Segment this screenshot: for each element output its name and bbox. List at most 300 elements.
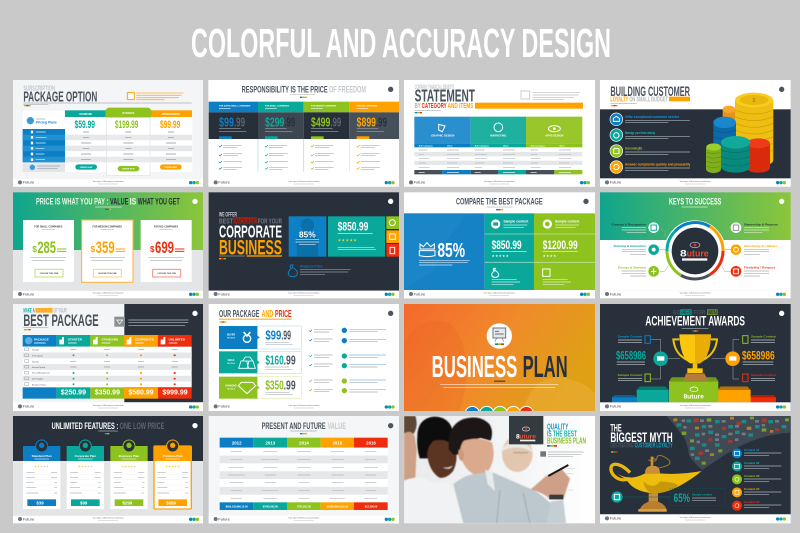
colour bar xyxy=(24,329,31,330)
intro note xyxy=(521,91,580,100)
heading: package option xyxy=(23,83,97,105)
podium xyxy=(612,377,776,402)
coin stacks xyxy=(706,93,773,173)
plan: business: $299 xyxy=(123,500,133,505)
heading: statement: STATEMENT xyxy=(415,86,475,106)
tip 3 xyxy=(610,145,690,157)
heading: compare: COMPARE THE BEST PACKAGE xyxy=(456,197,543,207)
offer panel: teal xyxy=(485,213,534,290)
data table: Sub Category xyxy=(419,144,433,147)
pricing table: Pricing Plans xyxy=(36,121,57,125)
table totals: $7563,562.00 xyxy=(263,505,279,508)
callout: right top: Sample Content xyxy=(751,335,776,339)
podium: 8uture xyxy=(683,393,704,400)
footer xyxy=(209,402,399,411)
panel: present and future value slide xyxy=(209,416,399,523)
plan: business xyxy=(105,108,151,175)
footer: Your topic of Business presentation xyxy=(92,404,124,407)
value table xyxy=(220,438,388,510)
package row: gold: .99 xyxy=(284,353,296,367)
panel: unlimited features slide xyxy=(13,416,203,523)
heading: statement: COMPANY FINANCIAL BENEFIT xyxy=(415,85,454,91)
colour bar xyxy=(611,105,618,106)
plan: business: $199.99 xyxy=(115,119,138,131)
package row: silver xyxy=(219,326,301,349)
plan: business: ORDER NOW xyxy=(122,169,135,171)
table prices xyxy=(23,387,192,399)
table rows: Social Management xyxy=(32,372,50,375)
year headers: 2012 xyxy=(232,440,242,445)
heading: price and value: VALUE xyxy=(110,197,128,207)
price card: medium: $ xyxy=(91,245,96,254)
package row: diamond: .99 xyxy=(284,379,296,393)
price panels: $99 xyxy=(219,116,234,130)
footer xyxy=(13,402,203,411)
panel: quality photo slide xyxy=(404,416,595,523)
analysis price xyxy=(288,265,351,277)
plan: standard: ORDER NOW xyxy=(80,167,92,169)
plan: professional: $99.99 xyxy=(160,119,180,131)
green coin stack xyxy=(706,143,721,173)
footer: Your topic of Business presentation xyxy=(288,517,319,520)
table prices: $250.99 xyxy=(61,390,86,397)
content 02 xyxy=(732,461,781,471)
table header: STANDARD xyxy=(102,338,119,342)
price card: big xyxy=(141,220,192,282)
plan: standard xyxy=(23,440,60,509)
stat: 65 percent: 65% xyxy=(674,491,690,505)
colour bar xyxy=(496,209,503,210)
table totals: $3256,8564,255.00 xyxy=(327,505,349,508)
heading: unlimited features: ONE LOW PRICE xyxy=(120,421,164,431)
table totals: $741,652.00 xyxy=(297,505,312,508)
heading: best package: OF YOUR xyxy=(53,308,67,314)
package row: silver: .99 xyxy=(281,329,291,343)
callout: left top: Sample Content xyxy=(618,335,642,339)
price card: small: $ xyxy=(32,245,37,254)
footer xyxy=(600,402,791,411)
footer: Your topic of Business presentation xyxy=(483,292,515,295)
plan: standard: ★★★★★ xyxy=(34,464,49,468)
feature circles xyxy=(342,328,386,393)
photo: team at whiteboard xyxy=(404,416,575,523)
callout: right top xyxy=(743,335,776,343)
footer: Future xyxy=(610,291,622,296)
key: energy xyxy=(618,266,659,277)
colour bar xyxy=(219,258,226,259)
content 01: Content 01 xyxy=(744,448,760,452)
content 02: Content 02 xyxy=(744,461,760,465)
callout: left value: $658986 xyxy=(616,350,646,363)
table header: STARTER xyxy=(68,338,83,342)
heading: achievement awards: FOR xyxy=(693,310,705,317)
icon: menu xyxy=(583,199,589,204)
heading: responsibility: OF FREEDOM xyxy=(329,84,366,94)
panel: responsibility pricing slide xyxy=(208,80,399,187)
stat: 85 percent xyxy=(289,216,326,257)
content 03 xyxy=(732,474,781,484)
plan: premium: Premium Plan xyxy=(163,454,183,458)
heading: biggest myth: THE xyxy=(610,423,622,435)
footer: Future xyxy=(218,516,231,521)
heading: corporate business: WE OFFER xyxy=(219,213,237,219)
stat panel: 85 percent: 85% xyxy=(437,240,465,262)
price panels: .99 xyxy=(376,116,387,130)
table rows xyxy=(23,347,192,387)
icon: menu xyxy=(388,87,393,92)
package row: silver: $99 xyxy=(265,329,281,343)
offer panel: green: $1200.99 xyxy=(543,238,578,252)
package row: diamond: $350 xyxy=(265,379,284,393)
column headers xyxy=(209,102,399,112)
heading: building customer: LOYALTY xyxy=(610,97,629,104)
watch xyxy=(549,495,563,499)
table rows xyxy=(220,448,388,502)
logo box xyxy=(509,416,543,444)
colour bar xyxy=(105,433,109,434)
colour bar xyxy=(300,433,307,434)
key: sensitivity: Sensitivity To Others xyxy=(744,244,778,248)
price panels: $899 xyxy=(357,116,376,130)
plan: premium: $699 xyxy=(166,500,176,505)
orange coin stack xyxy=(723,106,735,129)
content 03: Content 03 xyxy=(744,474,760,478)
package row: gold xyxy=(219,351,301,373)
plan: standard xyxy=(65,110,107,170)
footer: Your topic of Business presentation xyxy=(679,516,711,519)
pricing table xyxy=(23,108,192,175)
heading: price and value: IS xyxy=(130,197,136,207)
heading: achievement awards: GO xyxy=(673,310,680,317)
heading: package option: SUBSCRIPTION xyxy=(23,83,55,92)
plan: business: BUSINESS xyxy=(122,113,135,115)
colour bar xyxy=(611,451,618,453)
price card: medium: FOR MEDIUM COMPANIES xyxy=(93,225,123,228)
price panels: $499 xyxy=(311,116,330,130)
offer panel: green: Sample content xyxy=(555,220,580,224)
key: ownership xyxy=(731,222,778,233)
heading: business plan: PLAN xyxy=(523,350,568,384)
heading: achievement awards xyxy=(645,309,745,329)
footer: Your topic of Business presentation xyxy=(92,517,124,520)
plan: standard: STANDARD xyxy=(79,113,92,116)
icon: orange money xyxy=(725,351,740,366)
price card: medium: 359 xyxy=(96,238,115,257)
tip 1 xyxy=(610,113,690,126)
grey shirt xyxy=(453,471,555,523)
key: training xyxy=(613,244,659,255)
key: sensitivity xyxy=(731,244,778,255)
package row: gold: GOLD xyxy=(228,360,235,362)
connectors xyxy=(651,339,739,379)
heading: statement: AND ITEMS xyxy=(448,101,473,110)
note on dark panel xyxy=(114,317,188,327)
footer xyxy=(404,179,595,187)
heading: biggest myth: CUSTOMER LOYALTY xyxy=(635,443,673,450)
heading: best package: CHOICE xyxy=(36,308,52,314)
footer xyxy=(209,291,399,298)
colour bar xyxy=(105,209,111,210)
offer panel: green xyxy=(534,213,595,290)
table rows: Internet Speed xyxy=(32,366,45,369)
heading: quality xyxy=(547,422,586,446)
comparison table xyxy=(23,335,192,399)
key: ownership: Ownership & Purpose xyxy=(744,222,778,226)
dark panel xyxy=(600,109,791,178)
footer: Your topic of Business presentation xyxy=(679,180,711,183)
panel: achievement awards slide xyxy=(600,304,791,411)
key: flexibility xyxy=(731,266,775,277)
year headers: 2014 xyxy=(299,440,309,445)
plan: business xyxy=(110,440,148,509)
category bands: MARKETING xyxy=(490,133,506,137)
heading: best package: MAKE A xyxy=(23,308,35,314)
package row: diamond: DIAMOND xyxy=(225,384,237,387)
central ring logo: 8 xyxy=(680,248,687,258)
offer panel: teal: ★★★★★ xyxy=(492,254,509,258)
stat: 65 percent: Sample content xyxy=(692,493,712,497)
icon: pricing plans xyxy=(27,117,34,124)
table prices: $580.99 xyxy=(128,390,154,397)
year headers: 2016 xyxy=(366,440,376,445)
stat: package price: $850.99 xyxy=(338,220,369,234)
table header xyxy=(23,335,192,347)
analysis price: Analysis Price xyxy=(300,265,323,269)
price panels: .99 xyxy=(330,116,341,130)
callout: left bottom xyxy=(618,373,650,382)
plan: premium: ★★★★★ xyxy=(165,464,180,468)
stat: package price: ★★★★★ xyxy=(338,237,357,242)
blue coin stack xyxy=(713,117,736,160)
feature lists xyxy=(219,139,380,172)
callout: right bottom: Sample Content xyxy=(751,373,776,377)
panel: business plan slide xyxy=(404,304,595,420)
heading: our package: AND xyxy=(262,309,274,320)
footer xyxy=(404,291,595,298)
plan: business: Business Plan xyxy=(119,454,139,458)
content 05 xyxy=(732,500,781,511)
footer: Future xyxy=(218,404,231,409)
key: concept: Concept & Recognition xyxy=(611,222,646,226)
table totals: $659,120,866.12.00 xyxy=(226,505,248,508)
colour bar xyxy=(692,330,699,332)
data table: Sub Category xyxy=(475,144,489,147)
package row: diamond: PACKAGE xyxy=(227,387,236,390)
tip 1: Offer exceptional customer service xyxy=(625,115,679,119)
heading: biggest myth: BIGGEST MYTH xyxy=(610,429,673,445)
callout: right bottom xyxy=(743,373,776,382)
tip 2: Manage your time wisely xyxy=(625,131,655,135)
heading: corporate business: FOR YOUR xyxy=(258,216,282,225)
table totals xyxy=(220,502,388,510)
data table: Value xyxy=(503,145,509,147)
footer: Future xyxy=(23,516,35,521)
tip 2 xyxy=(610,129,690,141)
icon: menu xyxy=(388,423,393,428)
heading: corporate business: CORPORATE xyxy=(219,221,282,241)
heading: statement: CATEGORY xyxy=(422,101,447,110)
footer: Future xyxy=(23,291,35,296)
icon cloud xyxy=(667,416,791,470)
footer: Future xyxy=(414,180,426,185)
connectors xyxy=(659,228,731,271)
heading: price and value: PRICE IS WHAT YOU PAY : xyxy=(36,197,108,207)
footer: Your topic of Business presentation xyxy=(92,292,124,295)
icon: menu xyxy=(779,199,784,204)
teal coin stack xyxy=(721,136,750,173)
heading: unlimited features: UNLIMITED FEATURES : xyxy=(52,421,118,431)
key: concept xyxy=(611,222,659,233)
callout: left value xyxy=(616,350,646,364)
footer: Your topic of Business presentation xyxy=(679,404,711,407)
heading: our package: OUR PACKAGE xyxy=(219,309,259,320)
icon: teal money xyxy=(653,351,668,366)
column headers: FOR SMALL COMPANIES xyxy=(265,104,290,107)
icon: menu xyxy=(388,311,393,316)
red coin stack xyxy=(747,138,770,173)
heading: corporate business: BEST xyxy=(219,216,233,225)
footer: Your topic of Business presentation xyxy=(92,180,124,183)
stat panel: 85 percent xyxy=(404,213,485,290)
category bands: GRAPHIC DESIGN xyxy=(431,133,454,137)
package row: silver: PACKAGE xyxy=(227,337,236,340)
footer: Future xyxy=(23,180,35,185)
data table: Sub Category xyxy=(531,144,545,147)
tip 4: Answer complaints quickly and pleasantly xyxy=(625,163,690,167)
content 04: Content 04 xyxy=(744,487,760,491)
category bands xyxy=(414,117,582,143)
panel: keys to success slide xyxy=(600,192,791,298)
table totals: $12,256.00 xyxy=(365,505,378,508)
package row: diamond xyxy=(219,377,301,399)
footer xyxy=(600,179,791,187)
stat: package price xyxy=(328,216,385,257)
column headers: FOR SUPER SMALL COMPANIES xyxy=(219,104,251,107)
panel: best package slide xyxy=(13,304,203,411)
table rows xyxy=(65,132,192,162)
heading: statement: BY xyxy=(415,101,421,110)
footer: Your topic of Business presentation xyxy=(679,292,711,295)
heading: biggest myth: DESTIGATING xyxy=(610,443,634,450)
marker xyxy=(548,465,568,476)
heading: quality: IS THE BEST xyxy=(547,428,577,438)
price panels xyxy=(209,112,399,139)
table prices: $350.99 xyxy=(95,390,120,397)
price panels: .99 xyxy=(234,116,245,130)
year headers xyxy=(220,438,388,448)
table header: UNLIMITED xyxy=(169,338,186,342)
colour bar xyxy=(300,97,307,98)
footer: Future xyxy=(218,180,231,185)
central ring logo xyxy=(664,220,726,282)
price card: big: 699 xyxy=(155,238,174,257)
heading: price and value: WHAT YOU GET xyxy=(138,197,180,207)
icon: menu xyxy=(779,311,784,316)
price card: big: FOR BIG COMPANIES xyxy=(154,225,179,228)
price card: small: FOR SMALL COMPANIES xyxy=(34,225,63,228)
icon: presentation badge xyxy=(487,323,512,349)
table rows: Analytics Report xyxy=(32,383,47,386)
callout: right value: $658986 xyxy=(742,350,775,363)
key: flexibility: Flexibility / Respect xyxy=(744,266,775,270)
icon: teal stat circle xyxy=(611,491,670,503)
side tabs xyxy=(386,216,399,257)
colour dots xyxy=(465,406,534,411)
table header: PACKAGE xyxy=(34,338,49,342)
heading: corporate business xyxy=(219,213,282,259)
colour bar xyxy=(415,112,422,113)
package row: gold: PACKAGE xyxy=(227,362,236,365)
table header: CORPORATE xyxy=(135,338,154,342)
footer xyxy=(13,516,203,523)
heading: statement xyxy=(415,85,475,110)
footer: Your topic of Business presentation xyxy=(288,180,319,183)
panel: price is what you pay slide xyxy=(13,192,203,298)
heading: achievement awards: AHEAD xyxy=(681,310,691,317)
key: training: Training & Education xyxy=(613,244,646,248)
heading: responsibility: RESPONSIBILITY IS THE PRICE xyxy=(242,84,328,94)
logo box: uture xyxy=(519,433,536,440)
trophy xyxy=(673,334,717,381)
feature list xyxy=(23,129,65,162)
footer xyxy=(600,291,791,298)
heading: quality: BUSINESS PLAN xyxy=(547,436,586,446)
footer: Future xyxy=(218,291,231,296)
heading: biggest myth xyxy=(610,423,673,450)
footer xyxy=(600,514,791,523)
heading: best package: BEST PACKAGE xyxy=(23,311,99,330)
gold coin stack: $ xyxy=(753,98,756,104)
colour bar xyxy=(547,445,557,447)
table rows: 24/7 Support xyxy=(32,378,44,381)
stat: 65 percent xyxy=(670,488,725,506)
callout: left top xyxy=(618,335,650,343)
heading: quality: QUALITY xyxy=(547,422,569,432)
heading: building customer xyxy=(610,83,690,104)
colour bar xyxy=(220,321,226,323)
heading: present and future: PRESENT AND FUTURE xyxy=(262,421,326,431)
year headers: 2015 xyxy=(333,440,343,445)
data table xyxy=(414,143,582,174)
key: energy: Energy & Stamina xyxy=(618,266,646,270)
icon: menu xyxy=(192,423,198,428)
price card: medium xyxy=(82,220,133,282)
footer: Future xyxy=(610,180,622,185)
raised arm xyxy=(531,469,570,523)
data table: Value xyxy=(559,145,565,147)
magic lamp xyxy=(611,455,702,512)
footer: Your topic of Business presentation xyxy=(288,292,319,295)
price card: small: 285 xyxy=(37,238,56,257)
woman xyxy=(417,417,457,478)
content 05: Content 05 xyxy=(744,500,760,504)
package row: gold: $160 xyxy=(265,353,284,367)
stat: 85 percent: 85% xyxy=(299,229,316,239)
package row: silver: SILVER xyxy=(227,335,235,337)
logo box: 8 xyxy=(516,433,520,440)
central ring logo: uture xyxy=(687,248,709,258)
feature checks xyxy=(309,330,333,392)
plan: corporate: $99 xyxy=(80,500,88,505)
footer: Your topic of Business presentation xyxy=(288,404,319,407)
heading: building customer: ON SMALL BUDGET xyxy=(629,97,668,104)
icon: menu xyxy=(192,199,198,204)
plan: corporate: ★★★★★ xyxy=(78,464,93,468)
price card: big: CHOOSE THIS ONE xyxy=(157,273,177,275)
content 01 xyxy=(732,448,781,458)
man at left edge xyxy=(404,416,417,482)
heading: package option: PACKAGE OPTION xyxy=(23,89,97,105)
